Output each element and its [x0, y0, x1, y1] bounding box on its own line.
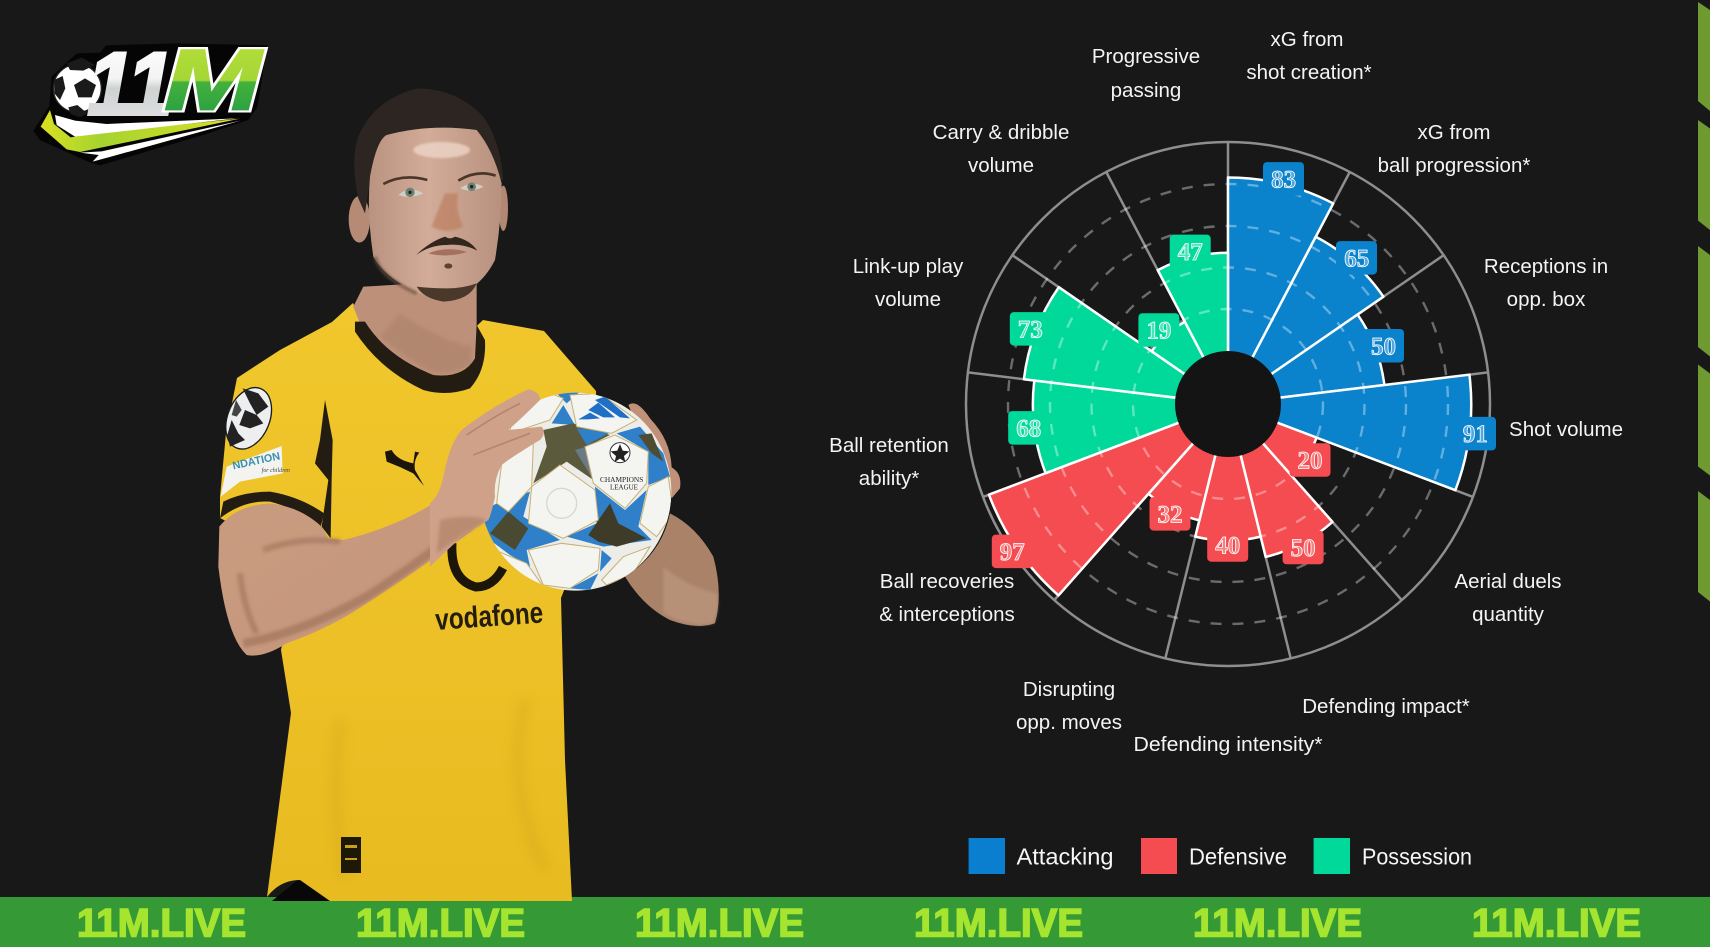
metric labels: shot creation*: [1246, 61, 1372, 84]
metric labels: Carry & dribble: [933, 121, 1069, 144]
shorts wedge: [272, 880, 330, 901]
metric labels: opp. box: [1507, 288, 1586, 311]
legend: Attacking: [1016, 844, 1114, 870]
attacking wedges: [1228, 178, 1483, 516]
metric labels: xG from: [1418, 121, 1490, 144]
value badges: 50: [1291, 535, 1316, 562]
ball: CHAMPIONS: [600, 476, 643, 484]
value badges: [992, 162, 1496, 568]
sleeve cuff: [220, 492, 324, 527]
metric labels: quantity: [1472, 603, 1545, 626]
value badges: 19: [1146, 318, 1171, 345]
metric labels: [829, 28, 1623, 756]
sponsor mark: [452, 543, 503, 587]
arm shading: [240, 540, 340, 633]
value badges: 47: [1178, 239, 1203, 266]
metric labels: ball progression*: [1378, 154, 1530, 177]
Champions League logo: [610, 443, 630, 463]
metric labels: Link-up play: [853, 255, 964, 278]
value badges: 32: [1158, 502, 1182, 528]
soul patch: [444, 263, 452, 269]
eyes: [398, 190, 423, 197]
white panels: [487, 393, 673, 588]
left arm: [218, 497, 473, 656]
metric labels: & interceptions: [879, 603, 1015, 626]
bottom banner: 11M.LIVE: [356, 902, 525, 946]
goatee: [417, 283, 477, 302]
metric labels: Defending impact*: [1302, 695, 1470, 718]
value badges: 83: [1271, 166, 1296, 194]
metric labels: volume: [875, 288, 941, 311]
logo: 11M: [33, 32, 267, 165]
value badges: 97: [1000, 539, 1025, 566]
value badges: 50: [1371, 333, 1396, 360]
right forearm and far fingers: [625, 403, 719, 626]
hair: [354, 88, 503, 213]
logo: 11M: M: [164, 32, 265, 128]
metric labels: volume: [968, 154, 1034, 177]
value badges: 20: [1298, 448, 1322, 475]
head: [349, 88, 508, 302]
ears: [349, 196, 370, 243]
bottom banner: 11M.LIVE: [77, 902, 246, 946]
bottom banner: 11M.LIVE: [1193, 902, 1362, 946]
foundation patch: NDATION: [231, 450, 281, 472]
legend: Defensive: [1189, 844, 1287, 870]
foundation patch: [221, 446, 290, 497]
star panels: [552, 405, 575, 425]
bottom banner: [0, 897, 1710, 947]
possession wedges: [1013, 237, 1290, 473]
metric labels: Ball retention: [829, 434, 949, 457]
bottom banner: 11M.LIVE: [635, 902, 804, 946]
sleeve stripe: [315, 400, 333, 538]
face: [369, 128, 502, 299]
bottom banner: 11M.LIVE: [914, 902, 1083, 946]
legend: Possession: [1362, 844, 1472, 870]
Champions League sleeve badge: [226, 386, 272, 450]
value badges: 91: [1463, 421, 1488, 448]
hand on ball: [430, 389, 544, 567]
pizza chart: [966, 142, 1490, 666]
nose shading: [432, 193, 463, 231]
metric labels: Ball recoveries: [880, 570, 1014, 593]
sponsor text: vodafone: [434, 597, 544, 637]
metric labels: opp. moves: [1016, 711, 1122, 734]
value badges: 68: [1016, 416, 1041, 442]
shirt tag: [341, 837, 361, 873]
outer ring: [966, 142, 1490, 666]
moustache: [416, 237, 477, 255]
metric labels: ability*: [859, 467, 919, 490]
adidas stripes: [578, 413, 600, 419]
metric labels: Defending intensity*: [1134, 733, 1323, 756]
value badges: 65: [1344, 246, 1369, 272]
right edge stripes: [1698, 2, 1710, 602]
collar: [355, 322, 485, 393]
metric labels: Shot volume: [1509, 418, 1623, 441]
value badges: 73: [1018, 316, 1043, 344]
defensive wedges: [970, 325, 1332, 595]
lips: [428, 249, 467, 256]
metric labels: Aerial duels: [1454, 570, 1562, 593]
ball: LEAGUE: [610, 484, 638, 492]
forehead highlight: [413, 142, 470, 158]
dashed rings: [1008, 184, 1448, 624]
foundation patch: for children: [262, 467, 290, 474]
metric labels: passing: [1111, 79, 1181, 102]
sleeve details: [217, 381, 424, 538]
metric labels: Receptions in: [1484, 255, 1608, 278]
spokes: [968, 142, 1488, 658]
player photo illustration: [217, 88, 719, 901]
embossed panel mark: [547, 488, 577, 518]
metric labels: Progressive: [1092, 45, 1200, 68]
shirt fold shading: [336, 700, 545, 880]
value badges: 40: [1215, 533, 1240, 560]
brows: [383, 173, 496, 184]
metric labels: xG from: [1271, 28, 1343, 51]
jaw stubble: [375, 257, 417, 293]
puma logo: [385, 450, 424, 486]
centre hole: [1175, 351, 1281, 457]
legend: [969, 838, 1472, 874]
bottom banner: 11M.LIVE: [1472, 902, 1641, 946]
shirt: [220, 303, 600, 901]
metric labels: Disrupting: [1023, 678, 1115, 701]
logo: 11M: 11: [87, 33, 173, 133]
logo: 11M: M: [164, 32, 265, 128]
ball: [480, 392, 673, 591]
neck: [353, 280, 485, 393]
